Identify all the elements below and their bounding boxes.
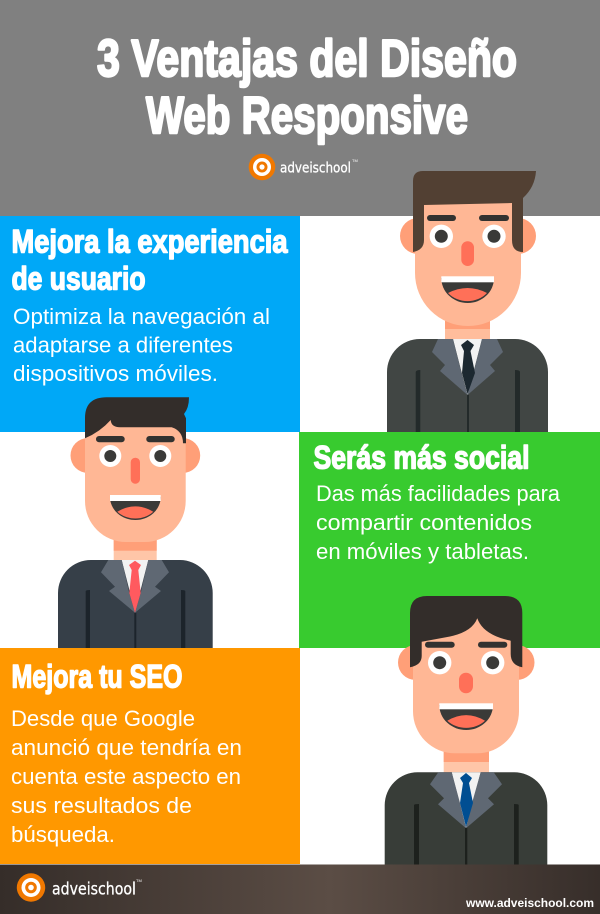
text: seo description: búsqueda. bbox=[11, 822, 115, 847]
title bbox=[97, 30, 517, 145]
heading: social: Serás más social bbox=[314, 440, 530, 476]
character: man with red tie bbox=[58, 397, 213, 648]
text: experience description: dispositivos móviles. bbox=[13, 361, 218, 386]
heading: experience: de usuario bbox=[12, 260, 146, 296]
title: Web Responsive bbox=[146, 87, 468, 145]
character: man with blue tie bbox=[385, 596, 547, 866]
text: social description: en móviles y tabletas. bbox=[316, 539, 529, 564]
panel: seras mas social bbox=[299, 432, 600, 648]
logo: footer adveischool: TM bbox=[136, 878, 142, 883]
text: social description bbox=[316, 481, 561, 564]
logo: footer adveischool: adveischool bbox=[52, 880, 136, 898]
heading: experience: Mejora la experiencia bbox=[12, 224, 288, 260]
character: man with brown hair bbox=[387, 171, 548, 432]
logo: header adveischool bbox=[249, 154, 358, 180]
text: social description: Das más facilidades para bbox=[316, 481, 561, 506]
text: seo description bbox=[11, 706, 242, 847]
text: website url: www.adveischool.com bbox=[465, 896, 594, 910]
panel: mejora la experiencia de usuario bbox=[0, 216, 300, 432]
text: seo description: Desde que Google bbox=[11, 706, 195, 731]
text: seo description: anunció que tendría en bbox=[11, 735, 242, 760]
text: seo description: cuenta este aspecto en bbox=[11, 764, 241, 789]
text: seo description: sus resultados de bbox=[11, 793, 192, 818]
panel: mejora tu seo bbox=[0, 648, 300, 864]
panel: header background bbox=[0, 0, 600, 216]
panel: footer bbox=[0, 864, 600, 914]
heading: seo: Mejora tu SEO bbox=[12, 658, 182, 694]
logo: header adveischool: TM bbox=[352, 158, 358, 163]
text: experience description bbox=[13, 304, 270, 386]
text: social description: compartir contenidos bbox=[316, 510, 532, 535]
text: experience description: adaptarse a diferentes bbox=[13, 332, 233, 358]
logo: header adveischool: adveischool bbox=[280, 160, 351, 176]
text: experience description: Optimiza la navegación al bbox=[13, 304, 270, 329]
heading: experience bbox=[12, 224, 288, 296]
logo: footer adveischool bbox=[17, 873, 142, 902]
